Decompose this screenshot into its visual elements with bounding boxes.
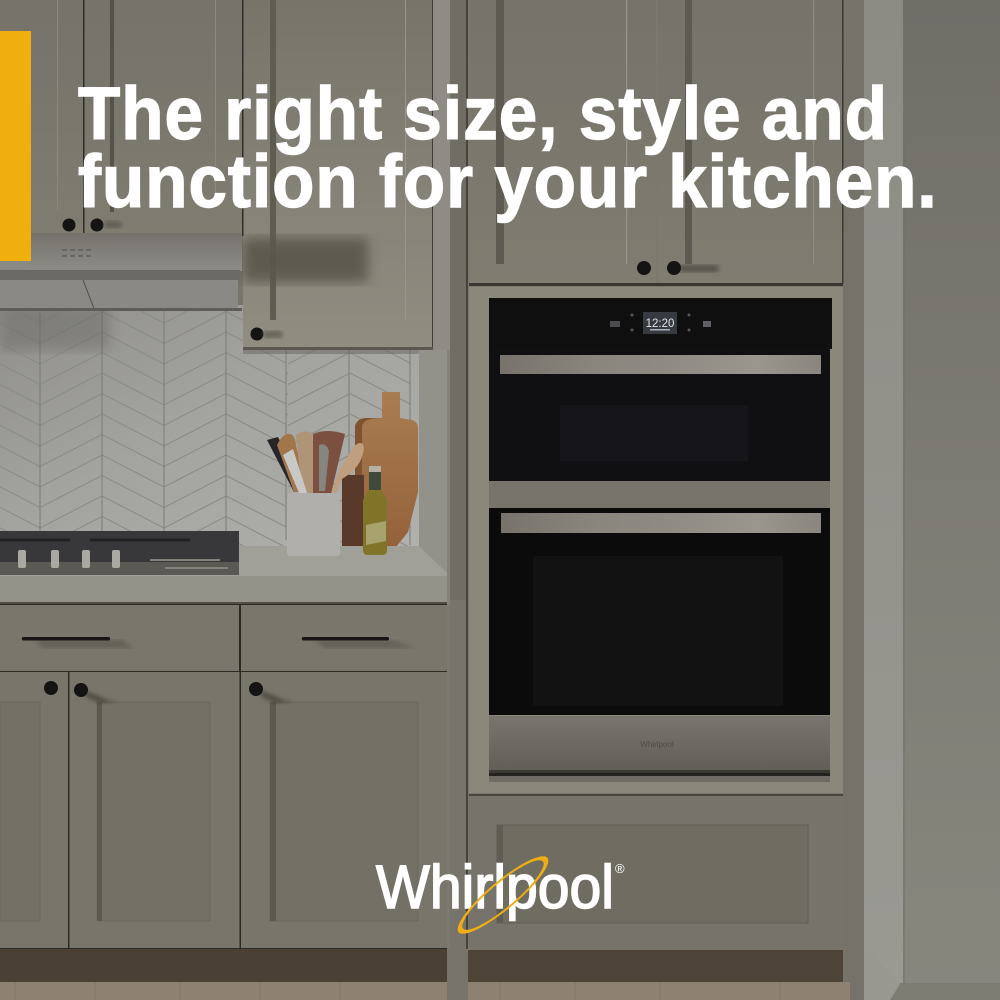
registered mark: ® — [615, 861, 625, 876]
double wall oven — [489, 298, 832, 782]
front cutting board — [362, 392, 418, 547]
door fronts — [0, 672, 447, 948]
drawer fronts — [0, 605, 447, 671]
yellow accent bar — [0, 31, 31, 261]
backsplash tiles — [0, 305, 419, 555]
toe kick and floor — [0, 949, 850, 1000]
tower cabinet frame — [433, 0, 864, 1000]
clock time: 12:20 — [646, 318, 674, 330]
lower oven door — [489, 508, 830, 715]
upper middle cabinet — [242, 0, 434, 350]
right wall — [845, 0, 1000, 1000]
countertop — [0, 546, 449, 605]
title: The right size, style and — [78, 73, 887, 156]
steel bottom panel: Whirlpool — [640, 740, 674, 749]
wall oven surround — [469, 287, 843, 793]
control panel — [489, 298, 832, 349]
marble utensil cup — [287, 493, 340, 556]
upper left cabinets — [0, 0, 243, 236]
Whirlpool logo — [376, 847, 625, 943]
base drawer cabinet — [469, 794, 843, 950]
Whirlpool logo: Whirlpool — [376, 853, 614, 921]
wall edge beside counter — [419, 350, 449, 590]
title: function for your kitchen. — [78, 141, 937, 224]
back cutting board — [355, 418, 382, 548]
upper tower cabinet doors — [469, 0, 844, 286]
microwave door — [489, 349, 830, 481]
utensils and cutting board — [267, 392, 418, 550]
logo swoosh — [450, 847, 556, 943]
steel divider — [489, 481, 830, 508]
gas cooktop — [0, 531, 239, 575]
range hood — [0, 233, 242, 311]
title — [78, 73, 937, 224]
oil bottle — [363, 466, 387, 555]
steel bottom panel — [489, 716, 830, 782]
lower cabinets — [0, 604, 449, 982]
